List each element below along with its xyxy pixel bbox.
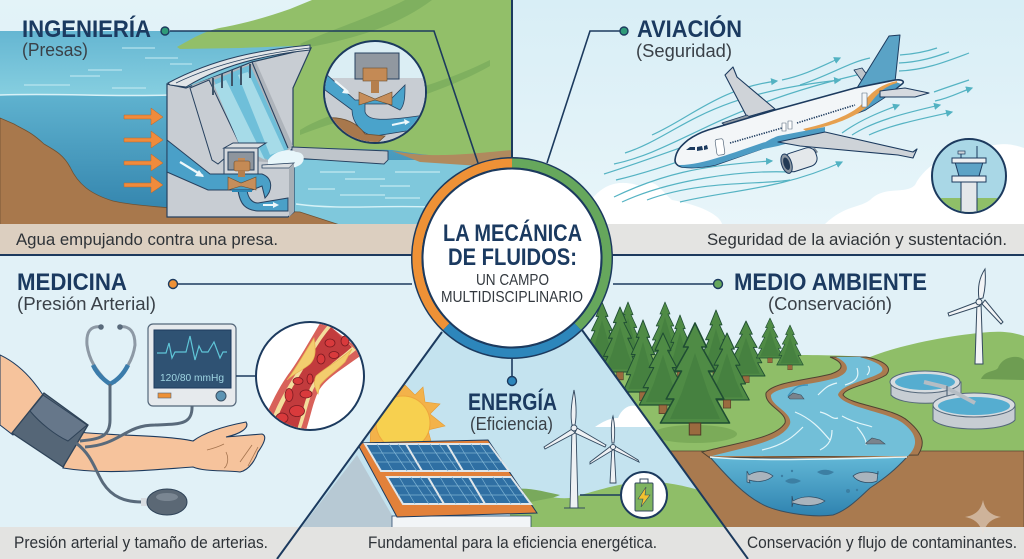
icon: tubes and bulb: [76, 405, 192, 515]
hub title line 2: DE FLUIDOS:: [448, 244, 577, 271]
foam: [268, 150, 304, 168]
airflow streamlines: [604, 48, 972, 202]
icon: house: [302, 455, 392, 527]
turbine housing: [224, 143, 266, 148]
icon: control tower: [930, 139, 1010, 218]
ground: [560, 332, 1024, 460]
turbine: [238, 158, 245, 161]
icon: river: [702, 357, 922, 516]
blood pressure reading: 120/80 mmHg: [160, 372, 224, 384]
icon: treatment ponds: [890, 371, 1015, 429]
subheading: (Eficiencia): [470, 414, 553, 434]
fish: [747, 471, 878, 507]
heading: medio ambiente: MEDIO AMBIENTE: [734, 269, 927, 296]
caption band: [277, 527, 748, 559]
caption band: [680, 527, 1024, 559]
panel: medio ambiente: [512, 256, 1024, 559]
shore left: [0, 118, 340, 225]
clouds: [580, 183, 722, 224]
icon: bushes: [981, 357, 1024, 380]
subheading: (Presas): [22, 40, 88, 60]
caption text: Fundamental para la eficiencia energética.: [368, 533, 657, 552]
icon: arm with cuff: [0, 355, 265, 472]
heading: ingeniería: INGENIERÍA: [22, 15, 151, 43]
caption band: [0, 224, 420, 255]
panel: medicina: [0, 256, 512, 559]
caption band: [0, 527, 320, 559]
icon: artery: [256, 320, 364, 438]
icon: monitor: [148, 324, 236, 406]
central hub: [411, 157, 613, 359]
subheading: (Conservación): [768, 294, 892, 314]
watermark sparkle: [965, 500, 1001, 535]
leader: medio ambiente: [613, 280, 722, 288]
icon: airplane: [675, 35, 929, 175]
leader: ingeniería: [161, 27, 478, 163]
icon: solar roof: [357, 440, 537, 517]
leader: energía: [508, 358, 516, 386]
caption text: Seguridad de la aviación y sustentación.: [707, 230, 1007, 249]
arrows: water pressure: [124, 108, 163, 193]
right water: [290, 160, 512, 225]
hub title: LA MECÁNICA: [443, 219, 582, 247]
conduit: [167, 140, 271, 198]
icon: cloud: [595, 406, 651, 427]
caption text: Agua empujando contra una presa.: [16, 230, 278, 249]
icon: forest: [584, 302, 803, 443]
icon: dam: [167, 45, 388, 217]
crest: [168, 45, 310, 87]
subheading: (Seguridad): [636, 41, 732, 61]
icon: battery: [621, 472, 667, 518]
connector: [236, 375, 257, 377]
heading: aviación: AVIACIÓN: [637, 15, 742, 43]
icon: wind turbines: [544, 390, 639, 508]
hub subtitle: UN CAMPO: [476, 272, 549, 289]
ground: [510, 482, 724, 527]
icon: turbine inset: [320, 41, 430, 150]
icon: sun: [370, 385, 445, 450]
heading: energía: ENERGÍA: [468, 388, 557, 416]
caption text: Presión arterial y tamaño de arterias.: [14, 533, 268, 552]
icon: stethoscope: [80, 324, 135, 441]
hub subtitle line 2: MULTIDISCIPLINARIO: [441, 289, 583, 306]
panel: aviación: [512, 0, 1024, 256]
leader: aviación: [547, 27, 628, 163]
hill: [177, 0, 512, 158]
caption band: [604, 224, 1024, 255]
icon: wind turbine: [948, 269, 1003, 364]
leader: medicina: [168, 280, 412, 288]
apron: [292, 147, 388, 164]
subheading: (Presión Arterial): [17, 294, 156, 314]
connector: [580, 494, 624, 496]
heading: medicina: MEDICINA: [17, 269, 127, 296]
panel: ingeniería: [0, 0, 512, 256]
icon: earth bank: [664, 451, 1024, 528]
panel: energía: [302, 330, 724, 559]
